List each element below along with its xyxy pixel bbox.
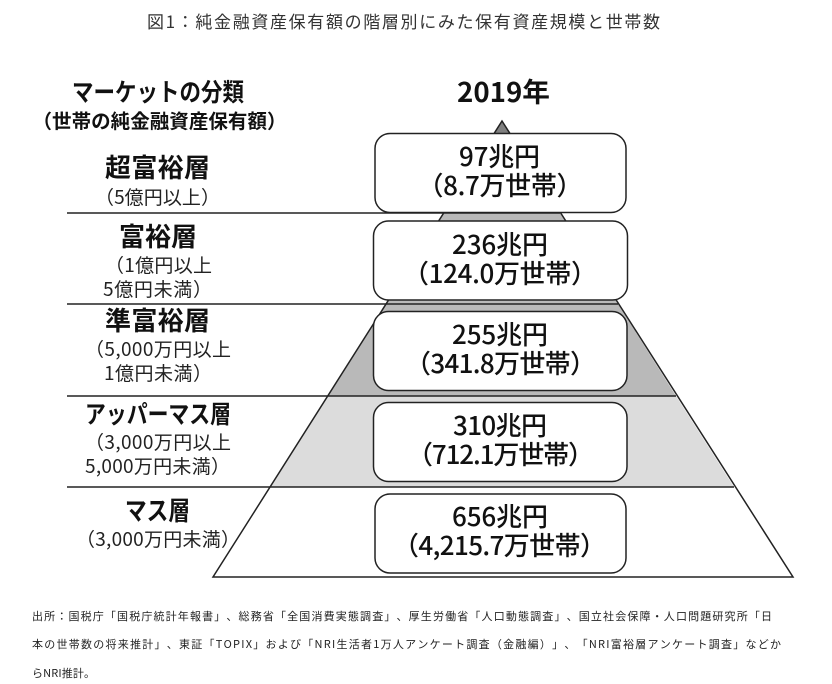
pyramid tier: mass <box>213 487 793 577</box>
pyramid tier: semi wealthy <box>328 304 676 396</box>
title: 図1：純金融資産保有額の階層別にみた保有資産規模と世帯数 <box>147 8 660 33</box>
pyramid <box>213 121 793 577</box>
pyramid tier: upper mass <box>270 396 734 487</box>
value box: upper mass: （712.1万世帯） <box>407 435 594 472</box>
label: ultra wealthy: 超富裕層 <box>105 148 210 185</box>
pyramid outline <box>213 121 793 577</box>
label: mass: マス層 <box>125 491 190 528</box>
value box: ultra wealthy: （8.7万世帯） <box>418 166 582 203</box>
label: mass: （3,000万円未満） <box>76 525 240 552</box>
value box: semi wealthy: （341.8万世帯） <box>405 344 596 381</box>
label: wealthy: （1億円以上 <box>105 251 212 278</box>
value box: wealthy: 236兆円 <box>452 225 548 262</box>
label: ultra wealthy <box>95 148 220 210</box>
source note: 出所：国税庁「国税庁統計年報書」、総務省「全国消費実態調査」、厚生労働省「人口動態調査」、国立社会保障・人口問題研究所「日 <box>32 608 772 624</box>
label: wealthy <box>103 217 212 302</box>
value box: mass <box>375 494 626 573</box>
label: semi wealthy: 1億円未満） <box>104 359 212 386</box>
label: ultra wealthy: （5億円以上） <box>95 183 220 210</box>
left column heading <box>32 73 286 134</box>
tier divider lines <box>67 213 734 487</box>
label: wealthy: 5億円未満） <box>103 275 212 302</box>
label: upper mass: （3,000万円以上 <box>85 428 231 455</box>
left column heading: マーケットの分類 <box>72 73 244 109</box>
label: semi wealthy <box>85 301 231 386</box>
value box: mass: 656兆円 <box>452 497 548 534</box>
label: upper mass: アッパーマス層 <box>85 395 231 431</box>
value box: wealthy: （124.0万世帯） <box>403 254 597 291</box>
label: upper mass: 5,000万円未満） <box>85 452 230 479</box>
label: semi wealthy: （5,000万円以上 <box>85 335 231 362</box>
label: mass <box>76 491 240 552</box>
label: upper mass <box>85 395 231 479</box>
left column heading: （世帯の純金融資産保有額） <box>32 105 286 134</box>
value box: ultra wealthy: 97兆円 <box>459 137 540 174</box>
label: semi wealthy: 準富裕層 <box>105 301 210 338</box>
pyramid tier: ultra wealthy <box>454 121 550 197</box>
label: wealthy: 富裕層 <box>119 217 197 254</box>
source note: 本の世帯数の将来推計」、東証「TOPIX」および「NRI生活者1万人アンケート調査（金融編）」、「NRI富裕層アンケート調査」などか <box>32 636 781 652</box>
value box: upper mass <box>374 402 627 482</box>
value box: mass: （4,215.7万世帯） <box>393 526 606 563</box>
source note: らNRI推計。 <box>32 665 95 681</box>
value box: semi wealthy <box>374 312 627 390</box>
pyramid tier: wealthy <box>386 213 618 304</box>
year heading: 2019年 <box>457 71 550 110</box>
value box: ultra wealthy <box>375 134 626 212</box>
value box: semi wealthy: 255兆円 <box>452 315 548 352</box>
value box: wealthy <box>374 221 628 300</box>
source note <box>32 608 781 681</box>
value box: upper mass: 310兆円 <box>453 406 547 443</box>
